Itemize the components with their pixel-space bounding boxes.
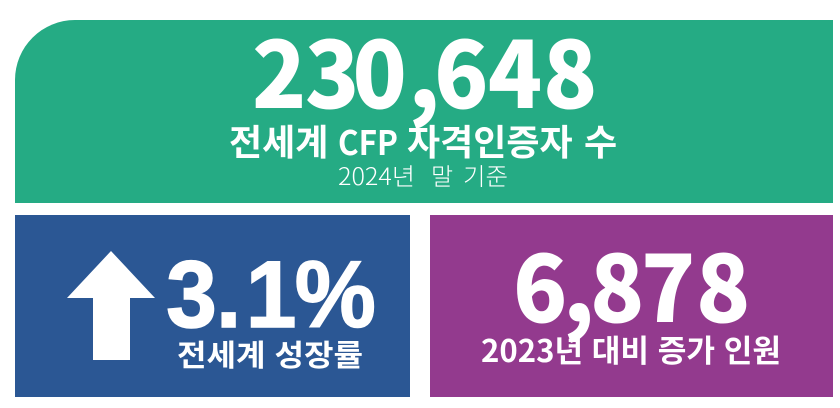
subheading: worldwide CFP professionals: 자격인증자 (407, 114, 573, 166)
subheading: worldwide CFP professionals: 전세계 (229, 114, 328, 166)
subheading: worldwide CFP professionals: 수 (584, 114, 617, 166)
label: increase compared with 2023: 2023년 대비 증가 인원 (481, 326, 781, 371)
green panel background (15, 20, 833, 203)
purple panel background (430, 215, 833, 397)
note: as of end of 2024: 2024년 (338, 157, 415, 192)
note: as of end of 2024: 기준 (463, 157, 508, 192)
note: as of end of 2024: 말 (431, 157, 453, 192)
subheading: worldwide CFP professionals: CFP (338, 116, 398, 165)
headline number: 230,648: 230,648 (252, 2, 597, 135)
panel: global growth rate (15, 215, 410, 397)
label: global growth rate: 전세계 성장률 (177, 331, 363, 375)
panel: increase over 2023 (430, 215, 833, 397)
icon: up arrow (67, 251, 155, 360)
blue panel background (15, 215, 410, 397)
growth number: 3.1%: 3.1% (166, 241, 376, 347)
increase number: 6,878: 6,878 (513, 216, 750, 349)
panel: total CFP professionals (15, 2, 833, 203)
